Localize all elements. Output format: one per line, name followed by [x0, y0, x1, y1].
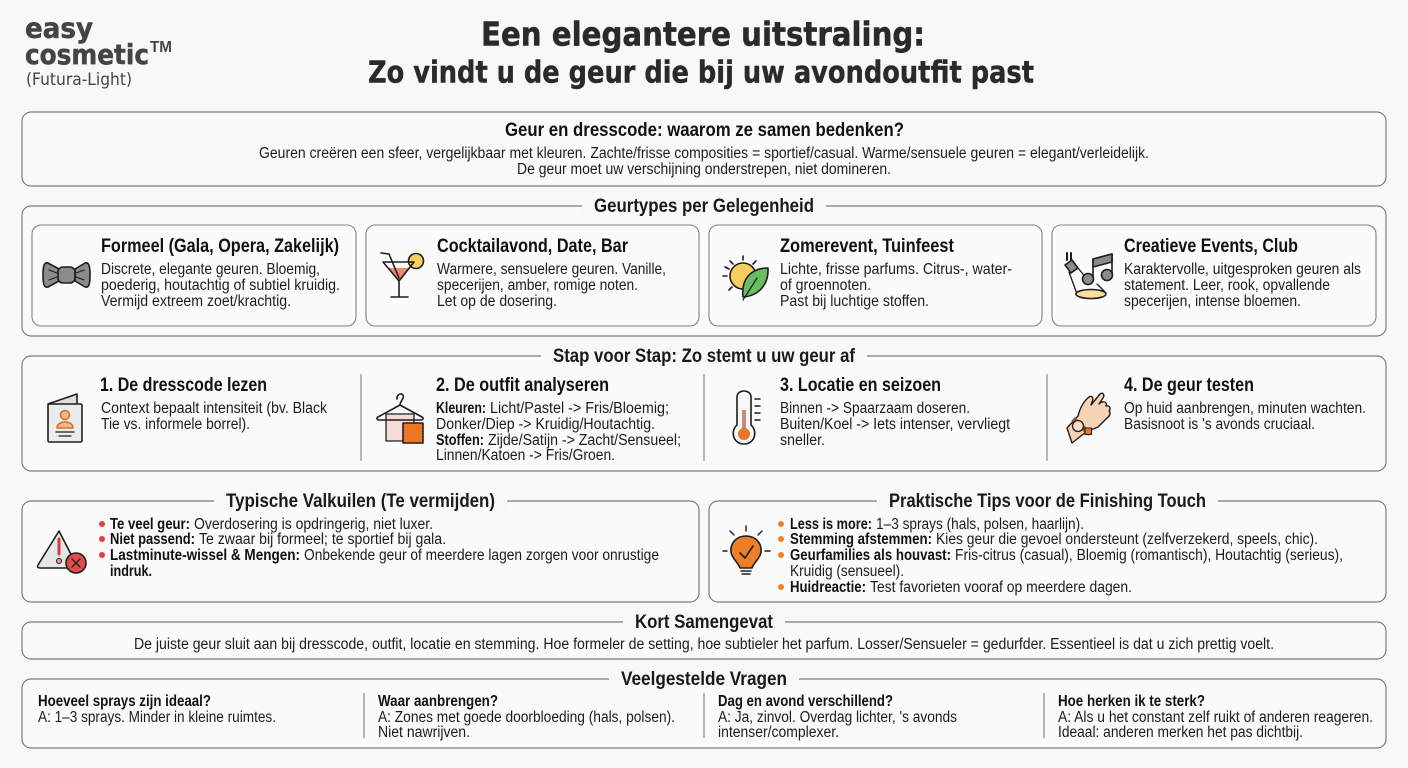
- card: cocktailavond: [366, 225, 699, 326]
- step 4: 4. De geur testen: [1124, 375, 1254, 396]
- tips list: 1–3 sprays (hals, polsen, haarlijn).: [876, 516, 1084, 533]
- icon: sun and leaf: [723, 256, 768, 300]
- card: formeel: Vermijd extreem zoet/krachtig.: [101, 293, 291, 310]
- step 1: 1. De dresscode lezen: [100, 375, 267, 396]
- panel: veelgestelde vragen: [22, 669, 1386, 748]
- tips list: [778, 516, 1343, 596]
- card: formeel: Formeel (Gala, Opera, Zakelijk): [101, 236, 339, 257]
- step 1: [48, 375, 327, 442]
- faq 2: Waar aanbrengen?: [378, 693, 498, 710]
- card: cocktailavond: Cocktailavond, Date, Bar: [437, 236, 629, 257]
- card: zomerevent: Zomerevent, Tuinfeest: [780, 236, 955, 257]
- card: creatieve events: [1052, 225, 1376, 326]
- panel: stap voor stap: [22, 346, 1386, 471]
- tips list: Kruidig (sensueel).: [790, 563, 904, 580]
- step 1: Context bepaalt intensiteit (bv. Black: [101, 400, 327, 417]
- section heading: faq: Veelgestelde Vragen: [621, 669, 787, 690]
- step 2: Stoffen:: [436, 432, 484, 449]
- card: zomerevent: [709, 225, 1042, 326]
- card: formeel: Discrete, elegante geuren. Bloemig,: [101, 261, 320, 278]
- step 4: Op huid aanbrengen, minuten wachten.: [1124, 400, 1366, 417]
- step 2: [377, 375, 681, 464]
- icon: hanger with fabric: [377, 394, 423, 443]
- faq 4: Ideaal: anderen merken het pas dichtbij.: [1058, 724, 1303, 741]
- pitfall list: Niet passend:: [110, 531, 195, 548]
- tips list: Less is more:: [790, 516, 872, 533]
- title: [368, 14, 1034, 90]
- card: creatieve events: statement. Leer, rook, opvallende: [1124, 277, 1330, 294]
- faq 3: Dag en avond verschillend?: [718, 693, 893, 710]
- step 3: 3. Locatie en seizoen: [780, 375, 941, 396]
- step 2: 2. De outfit analyseren: [436, 375, 609, 396]
- step 2: Licht/Pastel -> Fris/Bloemig;: [490, 400, 669, 417]
- tips list: Kies geur die gevoel ondersteunt (zelfverzekerd, speels, chic).: [936, 531, 1318, 548]
- icon: cocktail: [381, 253, 424, 297]
- icon: spotlight and music note: [1065, 253, 1112, 298]
- faq 4: [1058, 693, 1373, 741]
- faq 1: A: 1–3 sprays. Minder in kleine ruimtes.: [38, 709, 276, 726]
- faq 1: Hoeveel sprays zijn ideaal?: [38, 693, 211, 710]
- faq 1: [38, 693, 276, 726]
- faq 2: A: Zones met goede doorbloeding (hals, polsen).: [378, 709, 675, 726]
- logo: cosmetic: [25, 38, 149, 71]
- logo: easy: [25, 12, 93, 44]
- pitfall list: Te veel geur:: [110, 516, 190, 533]
- pitfall list: Lastminute-wissel & Mengen:: [110, 547, 300, 564]
- card: creatieve events: specerijen, intense bloemen.: [1124, 293, 1301, 310]
- step 2: Donker/Diep -> Kruidig/Houtachtig.: [436, 416, 655, 433]
- card: zomerevent: Lichte, frisse parfums. Citrus-, water-: [780, 261, 1012, 278]
- pitfall list: indruk.: [110, 563, 152, 580]
- card: creatieve events: Karaktervolle, uitgesproken geuren als: [1124, 261, 1361, 278]
- section heading: samenvatting: Kort Samengevat: [635, 612, 774, 633]
- step 1: Tie vs. informele borrel).: [101, 416, 250, 433]
- icon: thermometer: [733, 391, 760, 444]
- card: formeel: poederig, houtachtig of subtiel kruidig.: [101, 277, 340, 294]
- section heading: geurtypes: Geurtypes per Gelegenheid: [594, 196, 814, 217]
- faq 4: A: Als u het constant zelf ruikt of anderen reageren.: [1058, 709, 1373, 726]
- step 3: [733, 375, 1011, 449]
- step 2: Zijde/Satijn -> Zacht/Sensueel;: [488, 432, 681, 449]
- step 3: Buiten/Koel -> Iets intenser, vervliegt: [780, 416, 1011, 433]
- section heading: tips: Praktische Tips voor de Finishing Touch: [889, 491, 1206, 512]
- tips list: Test favorieten vooraf op meerdere dagen.: [870, 579, 1132, 596]
- step 2: Linnen/Katoen -> Fris/Groen.: [436, 447, 615, 464]
- faq 2: Niet nawrijven.: [378, 724, 470, 741]
- card: cocktailavond: Warmere, sensuelere geuren. Vanille,: [437, 261, 666, 278]
- faq 3: intenser/complexer.: [718, 724, 839, 741]
- card: cocktailavond: Let op de dosering.: [437, 293, 557, 310]
- intro text: Geuren creëren een sfeer, vergelijkbaar met kleuren. Zachte/frisse composities = sportief/casual. Warme/sensuele geuren = elegant/verleidelijk.: [259, 145, 1149, 162]
- logo: TM: [150, 39, 172, 56]
- logo: (Futura-Light): [26, 70, 132, 89]
- intro heading: Geur en dresscode: waarom ze samen bedenken?: [505, 120, 904, 141]
- pitfall list: [99, 516, 659, 580]
- faq 3: A: Ja, zinvol. Overdag lichter, 's avonds: [718, 709, 957, 726]
- faq 4: Hoe herken ik te sterk?: [1058, 693, 1205, 710]
- icon: warning triangle: [38, 531, 86, 573]
- step 2: Kleuren:: [436, 400, 486, 417]
- tips list: Stemming afstemmen:: [790, 531, 932, 548]
- panel: geur en dresscode: [22, 112, 1386, 186]
- tips list: Huidreactie:: [790, 579, 866, 596]
- card: zomerevent: of groennoten.: [780, 277, 871, 294]
- logo: [25, 12, 172, 89]
- step 3: Binnen -> Spaarzaam doseren.: [780, 400, 970, 417]
- faq 3: [718, 693, 957, 741]
- section heading: valkuilen: Typische Valkuilen (Te vermijden): [226, 491, 495, 512]
- step 4: Basisnoot is 's avonds cruciaal.: [1124, 416, 1315, 433]
- intro text: De geur moet uw verschijning onderstrepen, niet domineren.: [517, 161, 891, 178]
- intro text: [259, 145, 1149, 178]
- panel: praktische tips: [709, 491, 1386, 602]
- pitfall list: Overdosering is opdringerig, niet luxer.: [194, 516, 433, 533]
- summary text: De juiste geur sluit aan bij dresscode, outfit, locatie en stemming. Hoe formeler de setting, hoe subtieler het parfum. Losser/Sensueler = gedurfder. Essentieel is dat u zich prettig voelt.: [134, 636, 1274, 653]
- step 3: sneller.: [780, 432, 825, 449]
- section heading: stappen: Stap voor Stap: Zo stemt u uw geur af: [553, 346, 856, 367]
- panel: typische valkuilen: [22, 491, 699, 602]
- icon: hand with wristwatch: [1067, 393, 1110, 443]
- tips list: Geurfamilies als houvast:: [790, 547, 951, 564]
- card: creatieve events: Creatieve Events, Club: [1124, 236, 1298, 257]
- panel: geurtypes per gelegenheid: [22, 196, 1386, 336]
- card: zomerevent: Past bij luchtige stoffen.: [780, 293, 929, 310]
- icon: bow tie: [43, 263, 90, 287]
- panel: kort samengevat: [22, 612, 1386, 659]
- card: cocktailavond: specerijen, amber, romige noten.: [437, 277, 638, 294]
- card: formeel: [32, 225, 356, 326]
- faq 2: [378, 693, 675, 741]
- title: Zo vindt u de geur die bij uw avondoutfit past: [368, 56, 1034, 90]
- icon: light bulb with check: [723, 526, 770, 574]
- tips list: Fris-citrus (casual), Bloemig (romantisch), Houtachtig (serieus),: [955, 547, 1343, 564]
- pitfall list: Onbekende geur of meerdere lagen zorgen voor onrustige: [304, 547, 659, 564]
- step 4: [1067, 375, 1366, 443]
- title: Een elegantere uitstraling:: [481, 14, 925, 54]
- pitfall list: Te zwaar bij formeel; te sportief bij gala.: [199, 531, 446, 548]
- icon: invitation card: [48, 394, 82, 442]
